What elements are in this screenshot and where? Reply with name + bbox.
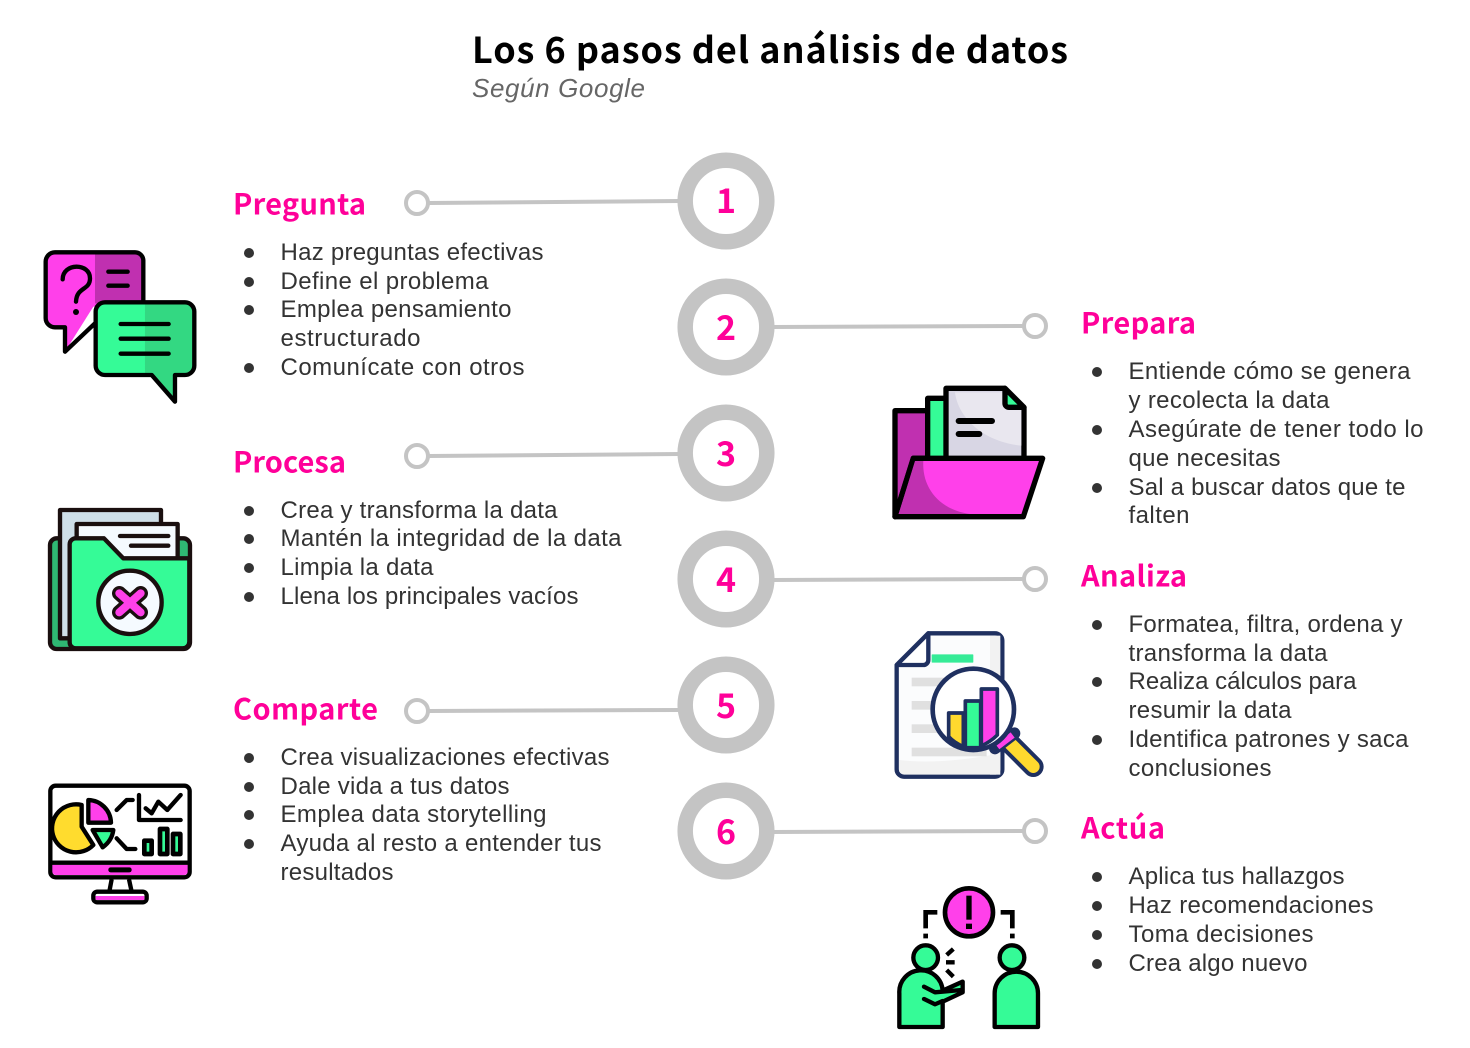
title: Los 6 pasos del análisis de datos (472, 22, 1068, 74)
panel: Actúa: Aplica tus hallazgos (1128, 863, 1344, 890)
panel: Pregunta (233, 182, 544, 381)
panel: Prepara: Sal a buscar datos que te (1128, 474, 1406, 501)
step 3 timeline marker: 3 (716, 427, 736, 476)
step 1 timeline marker (406, 160, 767, 242)
step 1 timeline marker: 1 (716, 174, 736, 223)
icon: speech bubbles (46, 252, 194, 402)
panel: Analiza: Identifica patrones y saca (1128, 726, 1409, 753)
panel: Actúa (1080, 806, 1374, 977)
panel: Analiza: resumir la data (1128, 697, 1292, 724)
panel: Prepara: Entiende cómo se genera (1128, 358, 1411, 385)
panel: Prepara: y recolecta la data (1128, 387, 1330, 414)
icon: people with alert (899, 888, 1038, 1027)
step 6 timeline marker: 6 (716, 805, 736, 854)
panel: Pregunta: Define el problema (280, 268, 489, 295)
subtitle: Según Google (472, 73, 645, 103)
panel: Procesa: Llena los principales vacíos (280, 583, 578, 610)
panel: Analiza: Formatea, filtra, ordena y (1128, 611, 1402, 638)
panel: Comparte: Crea visualizaciones efectivas (280, 744, 610, 771)
panel: Prepara: Prepara (1081, 300, 1196, 342)
panel: Actúa: Haz recomendaciones (1128, 892, 1374, 919)
panel: Pregunta: Pregunta (233, 182, 366, 224)
panel: Procesa (233, 440, 622, 610)
panel: Pregunta: Comunícate con otros (280, 354, 524, 381)
panel: Procesa: Crea y transforma la data (280, 497, 558, 524)
panel: Pregunta: Emplea pensamiento (280, 296, 512, 323)
step 2 timeline marker (685, 286, 1046, 368)
step 3 timeline marker (406, 412, 767, 494)
step 2 timeline marker: 2 (716, 301, 736, 350)
panel: Actúa: Crea algo nuevo (1128, 950, 1308, 977)
panel: Pregunta: estructurado (280, 325, 420, 352)
panel: Analiza: Analiza (1080, 554, 1187, 596)
panel: Analiza: conclusiones (1128, 755, 1272, 782)
panel: Prepara (1081, 300, 1424, 529)
step 6 timeline marker (685, 790, 1046, 872)
icon: folder with error mark (50, 510, 190, 649)
panel: Analiza (1080, 554, 1409, 782)
panel: Comparte: resultados (280, 859, 394, 886)
panel: Actúa: Actúa (1080, 806, 1165, 848)
step 5 timeline marker (406, 664, 767, 746)
panel: Analiza: transforma la data (1128, 640, 1328, 667)
panel: Procesa: Mantén la integridad de la data (280, 525, 622, 552)
panel: Actúa: Toma decisiones (1128, 921, 1314, 948)
step 4 timeline marker (685, 538, 1046, 620)
panel: Comparte (233, 686, 610, 886)
panel: Comparte: Comparte (233, 686, 378, 728)
panel: Prepara: Asegúrate de tener todo lo (1128, 416, 1424, 443)
step 5 timeline marker: 5 (716, 679, 736, 728)
icon: open folder (895, 388, 1043, 517)
panel: Procesa: Limpia la data (280, 554, 434, 581)
panel: Prepara: falten (1128, 502, 1190, 529)
icon: dashboard monitor (50, 786, 190, 902)
panel: Comparte: Ayuda al resto a entender tus (280, 830, 602, 857)
step 4 timeline marker: 4 (716, 553, 736, 602)
panel: Analiza: Realiza cálculos para (1128, 668, 1357, 695)
icon: document with magnifier (897, 633, 1033, 777)
panel: Comparte: Dale vida a tus datos (280, 773, 510, 800)
panel: Procesa: Procesa (233, 440, 346, 482)
panel: Comparte: Emplea data storytelling (280, 801, 546, 828)
panel: Pregunta: Haz preguntas efectivas (280, 239, 544, 266)
panel: Prepara: que necesitas (1128, 445, 1280, 472)
